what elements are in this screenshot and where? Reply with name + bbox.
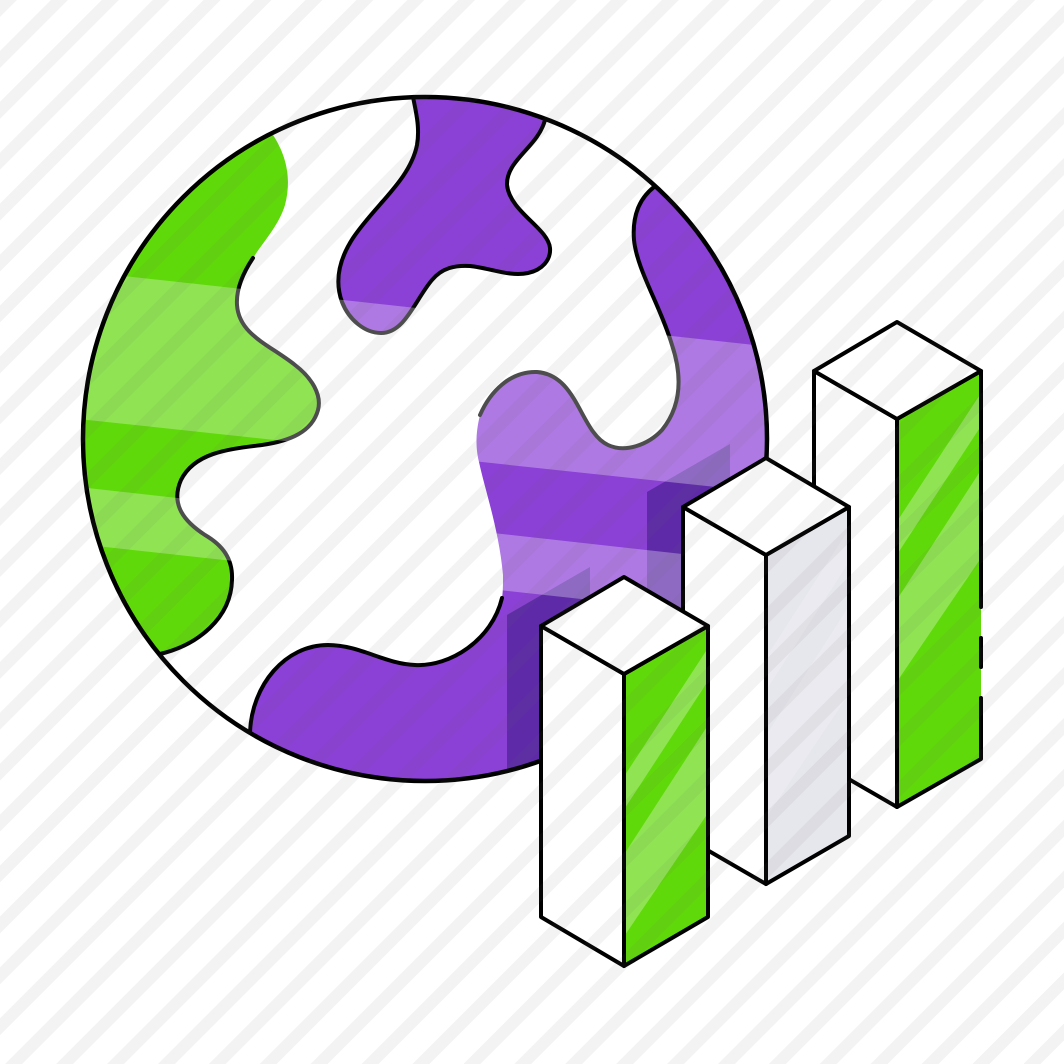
short bar edges xyxy=(624,626,708,966)
medium bar highlights xyxy=(767,529,849,816)
continent: purple east and south xyxy=(248,186,765,779)
short bar highlights xyxy=(625,648,708,935)
globe xyxy=(80,94,770,784)
bar shadows on continent xyxy=(507,444,730,800)
medium bar grey face xyxy=(766,507,849,884)
globe light bands xyxy=(86,276,765,608)
short bar top face xyxy=(541,577,708,674)
globe outline xyxy=(83,97,767,781)
bar: short xyxy=(541,577,708,966)
medium bar top face xyxy=(683,458,849,555)
continent: purple north xyxy=(336,99,552,335)
medium bar edges xyxy=(766,507,849,884)
tall bar top face xyxy=(814,322,981,419)
bar: medium xyxy=(683,458,849,884)
medium bar left face xyxy=(683,507,766,884)
tall bar edges xyxy=(897,371,981,807)
tall bar highlights xyxy=(898,393,981,680)
globe ocean xyxy=(83,97,767,781)
tall bar left face xyxy=(814,371,897,807)
continent: green west xyxy=(85,135,321,656)
short bar left face xyxy=(541,626,624,966)
tall bar green face xyxy=(897,371,981,807)
bar: tall xyxy=(814,322,981,807)
short bar green face xyxy=(624,626,708,966)
